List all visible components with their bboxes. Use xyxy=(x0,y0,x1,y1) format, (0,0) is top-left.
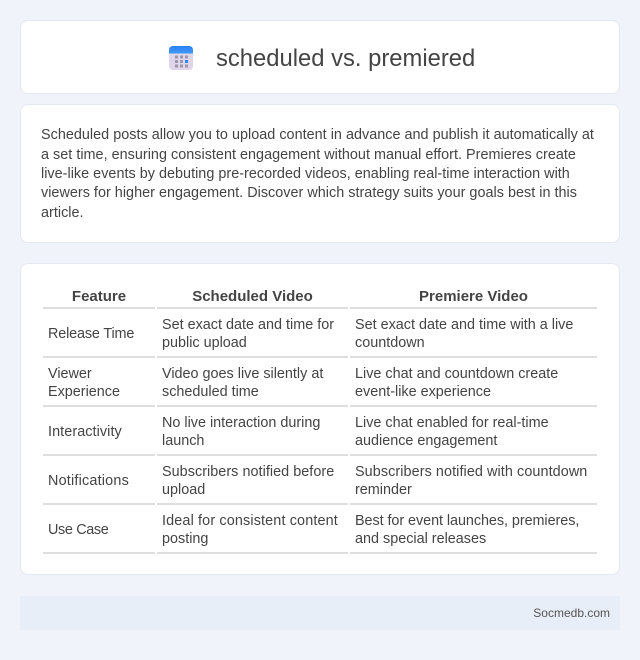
row: use case xyxy=(48,513,579,547)
row: release time: public upload xyxy=(162,335,247,351)
row: notifications: reminder xyxy=(355,482,412,498)
row: viewer experience: Viewer xyxy=(48,366,92,382)
table header row: Feature xyxy=(72,288,126,305)
icon: calendar xyxy=(169,46,193,70)
intro paragraph xyxy=(41,127,594,221)
panel: title card xyxy=(20,20,620,94)
row: notifications: upload xyxy=(162,482,205,498)
row: viewer experience xyxy=(48,366,558,400)
row: release time: countdown xyxy=(355,335,425,351)
row: interactivity: Live chat enabled for real-time xyxy=(355,415,549,431)
row: interactivity: No live interaction during xyxy=(162,415,320,431)
row: viewer experience: Live chat and countdown create xyxy=(355,366,558,382)
footer source text: Socmedb.com xyxy=(533,606,610,620)
row: viewer experience: scheduled time xyxy=(162,384,259,400)
intro paragraph: a set time, ensuring consistent engagement without manual effort. Premieres create xyxy=(41,147,576,163)
intro paragraph: Scheduled posts allow you to upload content in advance and publish it automatically at xyxy=(41,127,594,143)
table header row: Premiere Video xyxy=(419,288,528,305)
row: release time: Set exact date and time with a live xyxy=(355,317,573,333)
intro paragraph: live-like events by debuting pre-recorded videos, enabling real-time interaction with xyxy=(41,166,570,182)
panel: intro text xyxy=(20,104,620,243)
intro paragraph: article. xyxy=(41,205,84,221)
row: viewer experience: Experience xyxy=(48,384,120,400)
row: interactivity: audience engagement xyxy=(355,433,497,449)
row: release time xyxy=(48,317,573,351)
row: interactivity xyxy=(48,415,549,449)
table header row: Scheduled Video xyxy=(192,288,313,305)
row: release time: Release Time xyxy=(48,326,134,342)
row: notifications: Subscribers notified before xyxy=(162,464,334,480)
row: use case: Use Case xyxy=(48,522,108,538)
footer bar xyxy=(20,596,620,630)
row: use case: and special releases xyxy=(355,531,486,547)
table header row xyxy=(72,288,528,305)
row: viewer experience: event-like experience xyxy=(355,384,491,400)
row: release time: Set exact date and time for xyxy=(162,317,334,333)
row: notifications xyxy=(48,464,587,498)
intro paragraph: viewers for higher engagement. Discover which strategy suits your goals best in this xyxy=(41,185,577,201)
row: use case: posting xyxy=(162,531,208,547)
title: scheduled vs. premiered xyxy=(216,45,475,72)
row: interactivity: launch xyxy=(162,433,204,449)
row: interactivity: Interactivity xyxy=(48,424,122,440)
row: use case: Best for event launches, premieres, xyxy=(355,513,579,529)
row: use case: Ideal for consistent content xyxy=(162,513,338,529)
row: notifications: Notifications xyxy=(48,473,129,489)
panel: comparison table xyxy=(20,263,620,575)
row: viewer experience: Video goes live silently at xyxy=(162,366,323,382)
row: notifications: Subscribers notified with countdown xyxy=(355,464,587,480)
